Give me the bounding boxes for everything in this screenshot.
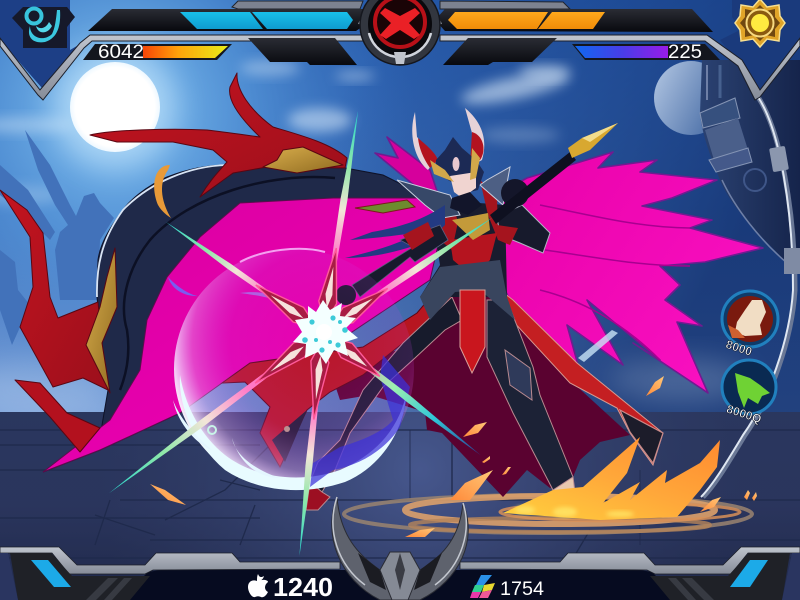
right energy bar bbox=[435, 9, 713, 32]
bottom hud bbox=[0, 497, 800, 600]
red outer coat left bbox=[222, 280, 452, 467]
floating embers bbox=[150, 376, 757, 537]
gem counter: 1754 bbox=[500, 579, 544, 600]
top hud bbox=[0, 0, 800, 100]
skill button: beast: 8000 bbox=[724, 337, 754, 359]
icon: golden sun bbox=[735, 0, 785, 47]
stone floor bbox=[0, 412, 800, 600]
icon: water swirl bbox=[12, 7, 75, 48]
small orange crescent bbox=[154, 165, 171, 218]
silver frame right bbox=[440, 35, 800, 100]
red coat trim right bbox=[500, 290, 663, 465]
central energy burst bbox=[293, 300, 358, 364]
cape magenta inner bbox=[43, 198, 445, 472]
right magenta wing feathers bbox=[375, 137, 763, 393]
skill button: green creature: 8000Q bbox=[725, 402, 763, 426]
right mana gauge bbox=[572, 42, 720, 63]
bottom dark panel bbox=[120, 570, 680, 600]
right corner panel bbox=[720, 0, 800, 90]
light streak behind wing bbox=[578, 330, 618, 362]
right top tab bbox=[440, 1, 570, 9]
left lower dark tab bbox=[248, 38, 357, 65]
left health gauge: 6042 bbox=[98, 42, 144, 63]
spear bbox=[490, 123, 618, 224]
burgundy inner coat bbox=[330, 290, 630, 497]
icon: apple bbox=[248, 574, 268, 597]
castle spires silhouette bbox=[0, 130, 114, 345]
pauldrons bbox=[355, 167, 510, 218]
left energy bar bbox=[88, 9, 372, 31]
central crescent ornament bbox=[332, 497, 468, 600]
right mana gauge: 225 bbox=[668, 42, 702, 63]
torso and front panel bbox=[420, 180, 515, 373]
energy bubble bbox=[168, 249, 414, 490]
skill button: green creature bbox=[722, 360, 776, 426]
head with horned helmet bbox=[412, 108, 484, 215]
flame ripple rings bbox=[344, 495, 752, 533]
sky background bbox=[0, 0, 800, 420]
left top tab bbox=[232, 1, 363, 9]
curved silver arc bbox=[701, 97, 800, 497]
distant planet bbox=[654, 61, 728, 135]
flowing hair bbox=[345, 205, 445, 258]
right corner module bbox=[650, 553, 800, 600]
moon bbox=[53, 45, 177, 169]
stone tower bbox=[700, 60, 800, 264]
silver frame left bbox=[0, 35, 365, 100]
left health gauge bbox=[83, 42, 232, 63]
left corner panel bbox=[0, 0, 82, 88]
bottom frame right bbox=[460, 547, 800, 574]
bottom frame left bbox=[0, 547, 340, 574]
legs bbox=[306, 297, 575, 510]
cape navy outer band bbox=[43, 165, 440, 472]
fire slash bbox=[450, 437, 720, 520]
skill button: beast bbox=[722, 291, 778, 359]
six point star blast arms bbox=[250, 247, 393, 420]
central emblem bbox=[358, 0, 442, 65]
energy rays bbox=[107, 110, 494, 556]
left corner module bbox=[0, 553, 150, 600]
cape red fringes and gold trim bbox=[0, 73, 347, 452]
right lower dark tab bbox=[443, 38, 557, 65]
left arm bbox=[336, 222, 448, 305]
icon: color gems bbox=[470, 575, 495, 598]
right arm and sleeve bbox=[497, 179, 550, 253]
